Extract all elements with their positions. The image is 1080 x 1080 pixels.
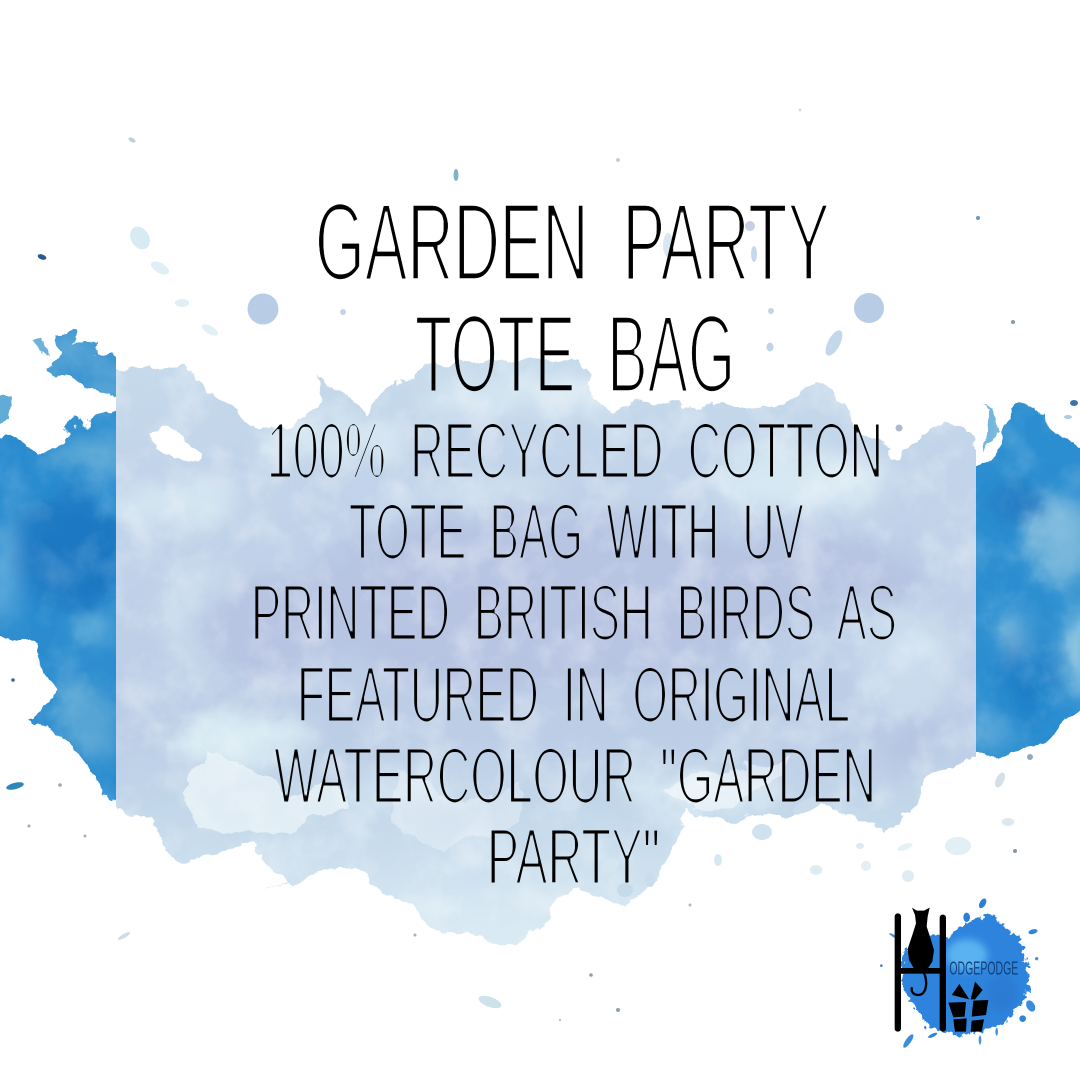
title: TOTE BAG [415,293,735,416]
panel: saturated blue splash, left edge [0,329,116,802]
panel: saturated blue splash, right edge [976,402,1080,759]
logo: Hodgepodge [880,897,1038,1049]
text block: product description [251,406,897,901]
lighter wash patches [115,373,955,810]
text block: product description: PARTY" [487,812,660,901]
pale holes [150,426,200,464]
title [315,181,830,416]
panel: pale central watercolour splash [100,355,990,943]
lavender core [195,510,935,763]
icon: letter H [895,913,946,1032]
text: brand name: ODGEPODGE [949,958,1018,979]
icon: logo blue splash [880,897,1038,1049]
icon: gift box [948,982,988,1032]
icon: cat silhouette [908,908,934,995]
